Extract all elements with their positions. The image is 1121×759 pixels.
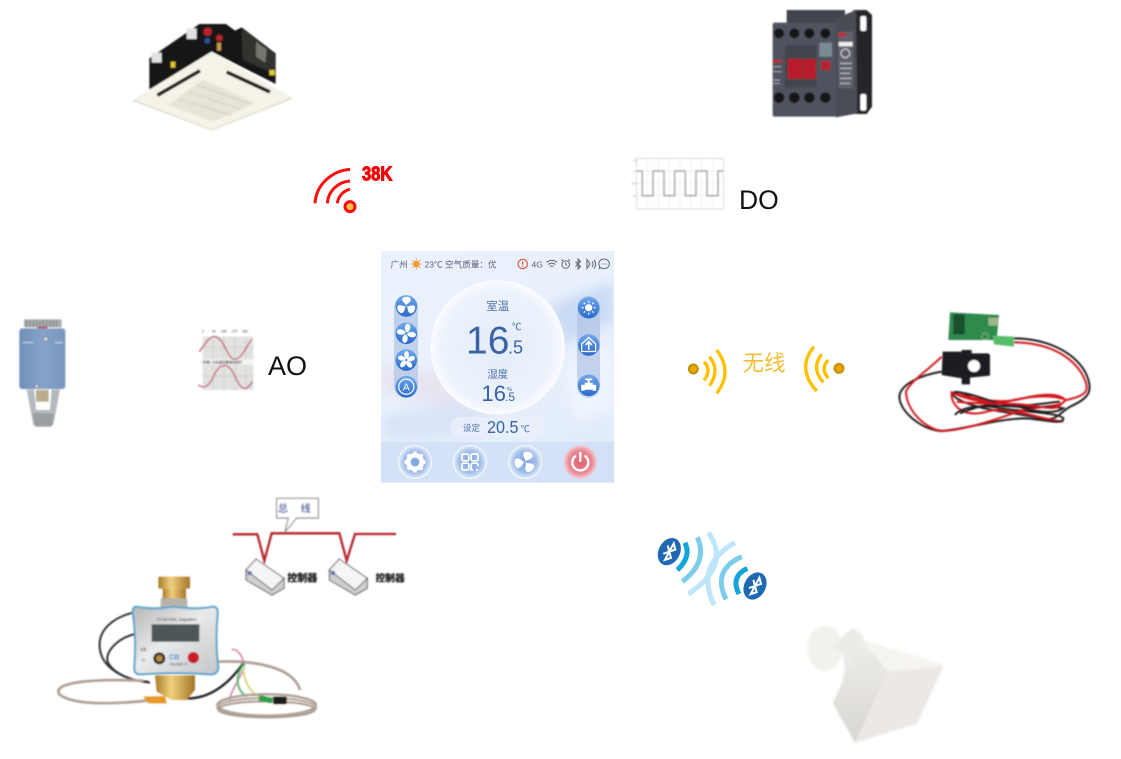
controller 2	[329, 559, 405, 595]
label: room temperature: 室温	[486, 299, 510, 313]
icon: wireless signal, sender	[689, 350, 725, 393]
chart: digital output square wave: 0	[633, 194, 635, 198]
setpoint pill	[450, 417, 545, 437]
value: room temperature: 16	[466, 320, 509, 362]
image: ultrasonic heat meter: CB	[169, 652, 180, 661]
chart: analog output sine waves: 中用2 小分高位置有向位行	[203, 359, 243, 364]
button: fan low	[396, 295, 417, 317]
button: power	[564, 445, 597, 479]
label: wireless: 无线	[742, 352, 786, 376]
button: settings	[398, 445, 432, 479]
gauge disc: %	[507, 387, 512, 393]
controller 1: 控制器	[287, 571, 317, 584]
callout: bus	[277, 498, 318, 532]
label: 38K: 38K	[362, 164, 393, 186]
status icons	[518, 259, 609, 269]
value: humidity: 16	[482, 381, 506, 406]
icon: wireless signal, receiver	[806, 347, 843, 391]
button: sun mode	[578, 297, 600, 318]
image: ultrasonic heat meter: CE	[141, 647, 147, 652]
image: ultrasonic heat meter: EN1500 IP	[170, 663, 188, 667]
label: DO: DO	[739, 185, 779, 215]
image: ultrasonic heat meter	[58, 577, 316, 717]
image: current transformer with wires	[899, 312, 1090, 431]
chart: digital output square wave	[632, 158, 723, 209]
gauge disc: ℃	[512, 322, 522, 333]
status bar: 23℃ 空气质量：优	[424, 258, 497, 270]
button: home mode	[578, 334, 600, 356]
image: white wall-mounted sensor	[808, 626, 943, 743]
button: fan	[509, 445, 542, 479]
controller 2: 控制器	[376, 572, 405, 584]
decorative gradient wisps	[381, 282, 614, 442]
left fan speed strip	[394, 295, 418, 398]
label: humidity: 湿度	[487, 368, 509, 380]
chart: analog output sine waves: 180	[221, 330, 227, 334]
setpoint pill: 设定	[463, 423, 481, 433]
chart: analog output sine waves: 0	[202, 330, 204, 334]
image: ultrasonic heat meter: CCM700L Sapalien	[157, 617, 197, 622]
chart: analog output sine waves	[199, 330, 253, 390]
setpoint pill: 20.5	[487, 417, 518, 437]
status bar: 广州	[390, 258, 408, 270]
terminal block	[993, 336, 1014, 347]
icon: bluetooth link	[653, 533, 771, 605]
controller 1	[246, 559, 317, 595]
gauge disc	[431, 281, 564, 414]
status bar: 4G	[532, 260, 543, 270]
image: AC contactor	[773, 10, 872, 117]
button: valve mode	[578, 374, 600, 396]
image: cassette fan coil unit	[133, 24, 292, 131]
image: ultrasonic heat meter: DI	[142, 659, 145, 663]
wires	[899, 338, 1090, 431]
icon: sun weather	[411, 258, 422, 270]
button: fan auto: A	[403, 382, 410, 394]
circuit board	[948, 312, 999, 340]
setpoint pill: ℃	[521, 424, 530, 434]
image: valve actuator	[19, 319, 65, 427]
chart: digital output square wave: 1.5	[633, 159, 637, 163]
button: fan medium	[396, 322, 417, 344]
button: fan auto	[396, 376, 417, 398]
chart: analog output sine waves: 360	[242, 330, 248, 334]
chart: analog output sine waves: 270	[232, 330, 237, 334]
status bar	[390, 258, 543, 270]
right mode strip	[577, 296, 600, 398]
label: AO: AO	[268, 351, 307, 381]
diagram: bus wiring with controllers	[233, 498, 405, 595]
CT clamp	[942, 350, 990, 384]
gauge disc: .5	[505, 390, 515, 404]
icon: red 38K infrared signal	[315, 164, 393, 212]
bottom control bar background	[381, 442, 614, 482]
panel: thermostat touch screen	[381, 251, 614, 483]
callout: bus: 总	[278, 502, 288, 515]
chart: digital output square wave: 0.5	[632, 182, 636, 186]
chart: digital output square wave: 1	[633, 170, 635, 174]
gauge disc: .5	[508, 338, 523, 358]
chart: analog output sine waves: 90	[212, 330, 216, 334]
callout: bus: 线	[301, 502, 311, 515]
button: fan high	[396, 349, 417, 371]
button: apps grid	[453, 445, 487, 479]
